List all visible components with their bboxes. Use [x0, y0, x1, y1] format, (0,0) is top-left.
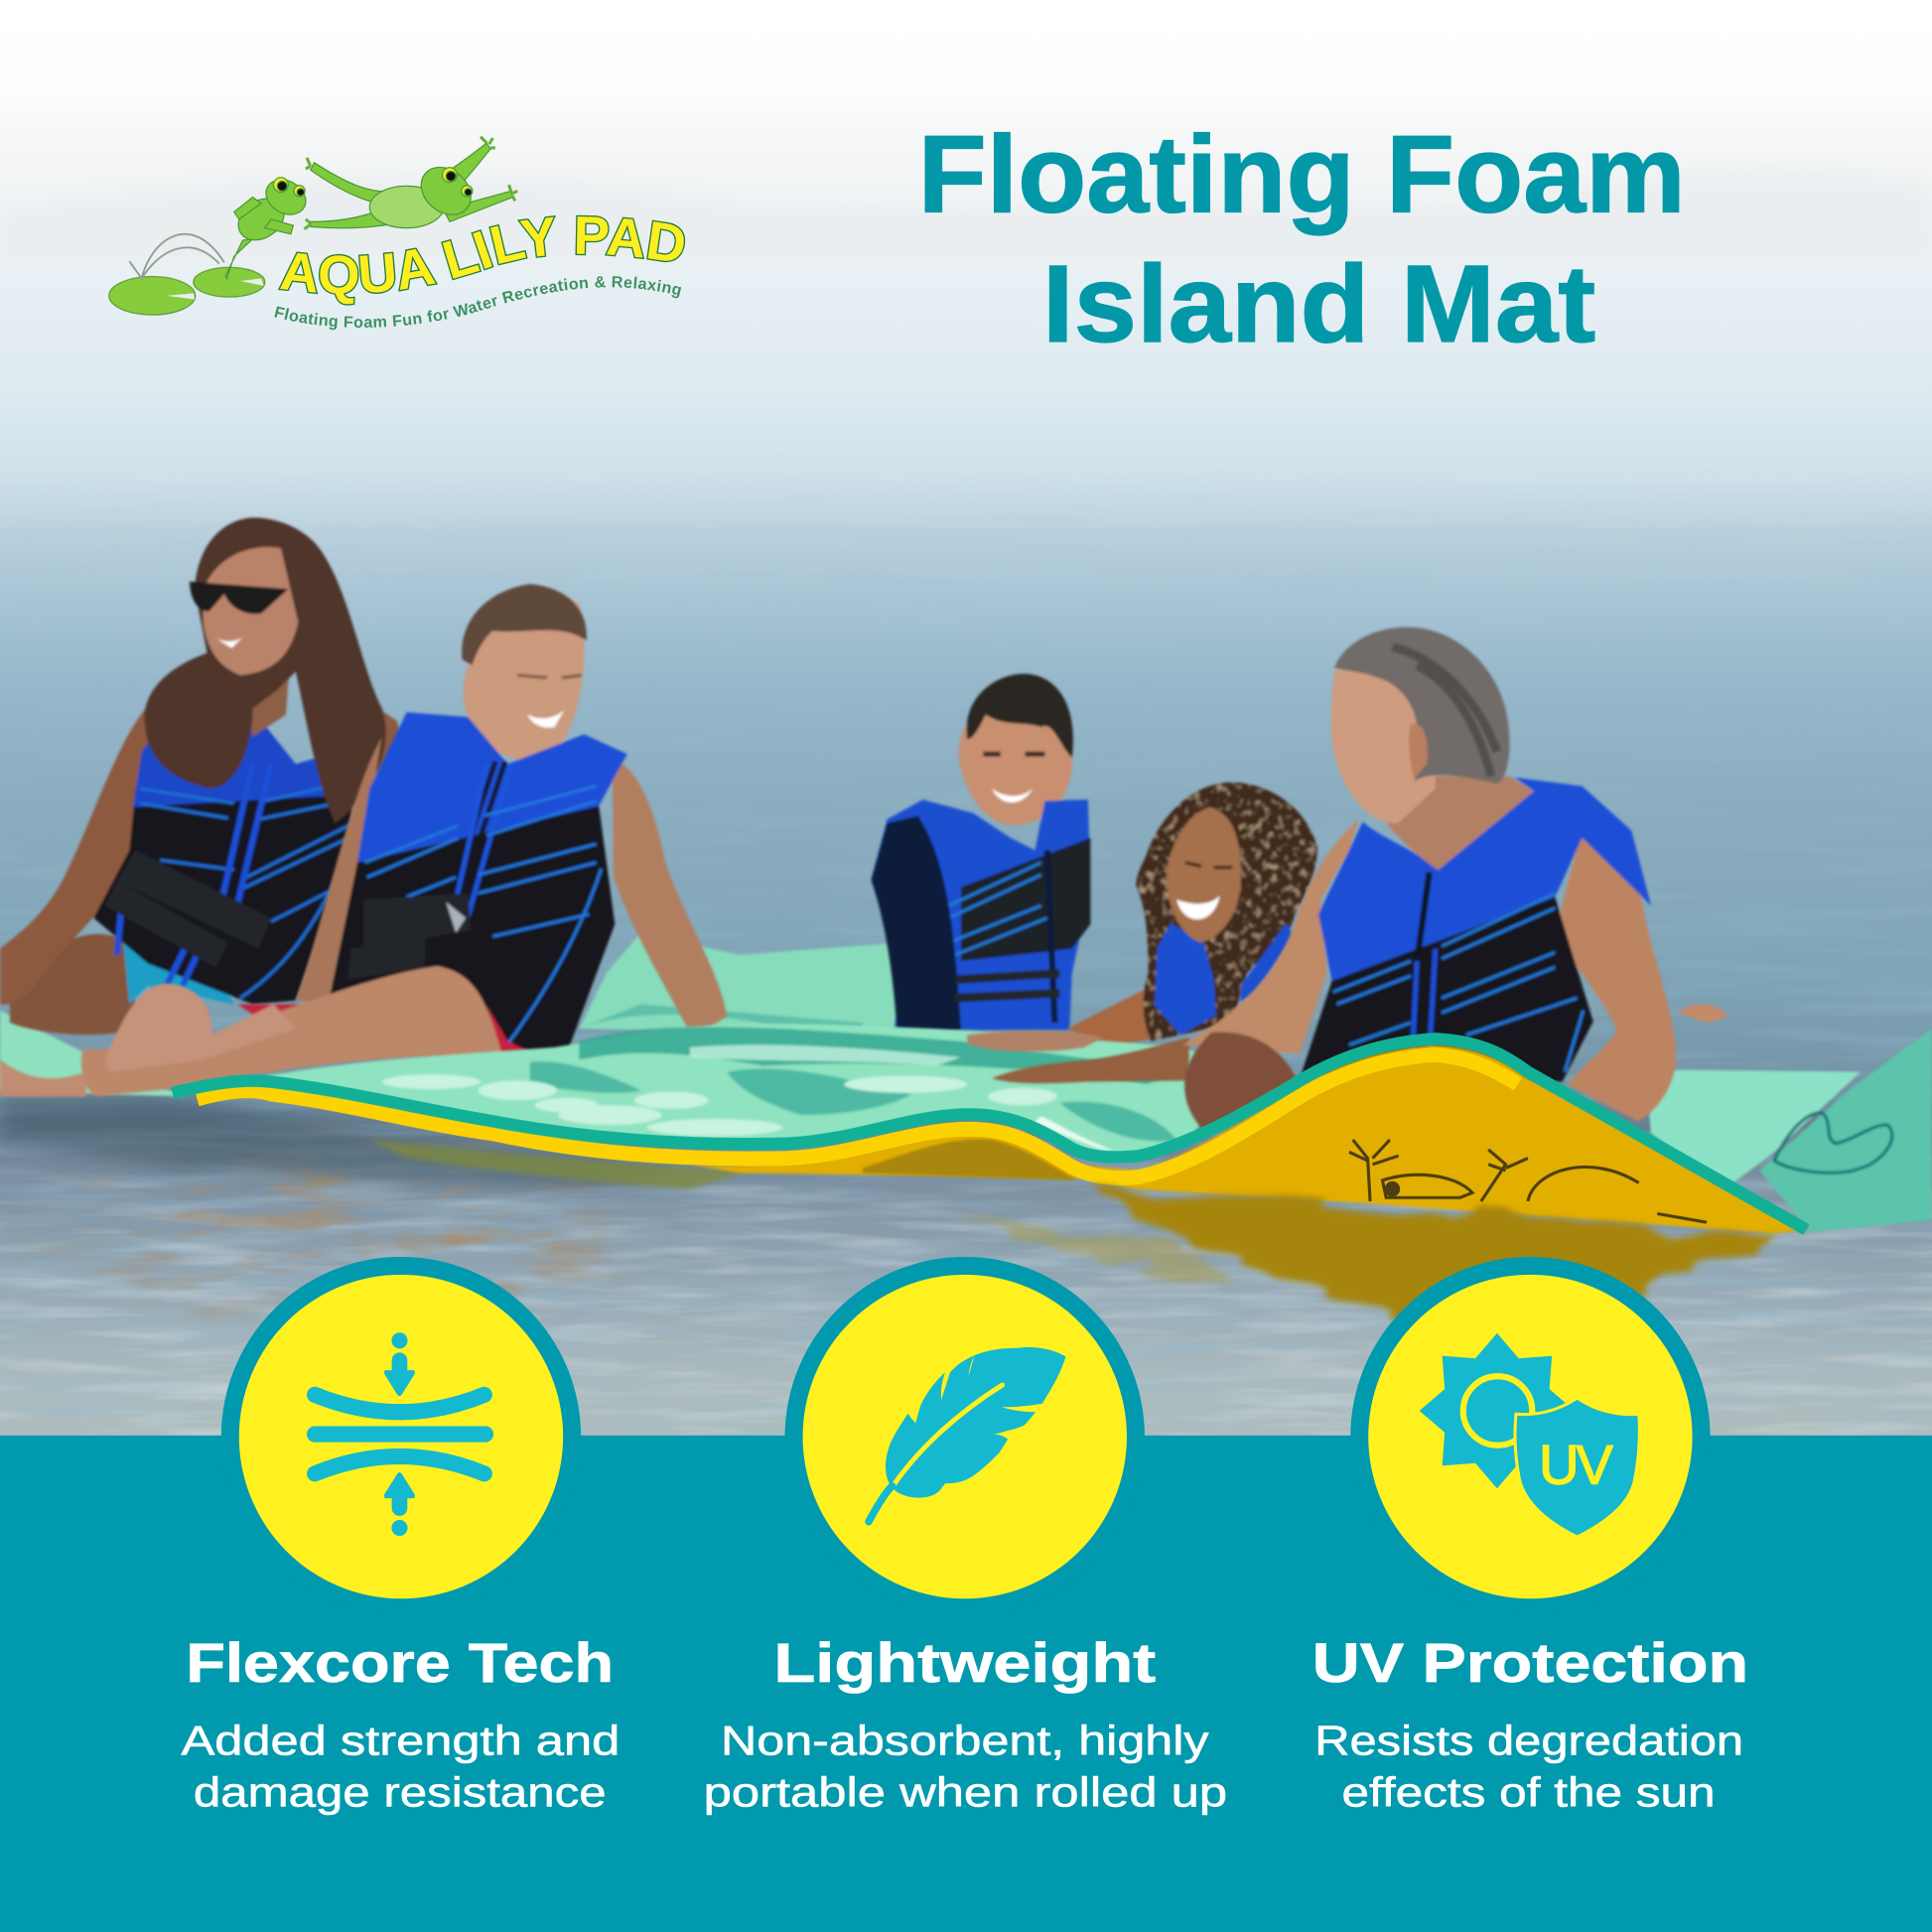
logo: wordmark: AQUA LILY PAD [278, 214, 685, 306]
heading: Lightweight [773, 1631, 1156, 1694]
icon: sun with UV shield: UV [1539, 1433, 1613, 1495]
badge circle [221, 1257, 581, 1616]
description: Non-absorbent, highly [721, 1717, 1209, 1763]
boy: dark sleeve [871, 816, 961, 1031]
description: effects of the sun [1342, 1768, 1716, 1815]
background photo: lake water and hazy sky [0, 0, 1932, 1442]
icon: compression arrows [307, 1332, 493, 1536]
mat: shadowed underside [863, 1139, 1078, 1180]
hands on the mat [967, 1031, 1189, 1083]
young man: red shorts [238, 1004, 538, 1057]
boy: vest [871, 799, 1090, 1031]
description: damage resistance [194, 1768, 607, 1815]
woman: arms [0, 690, 404, 1005]
young man: buckle and straps [347, 894, 471, 980]
description [181, 1717, 620, 1815]
boy: head [959, 696, 1072, 826]
description [1314, 1717, 1743, 1815]
badge circle [785, 1257, 1145, 1616]
older man: vest [1302, 897, 1593, 1082]
logo: Aqua Lily Pad [108, 135, 685, 330]
logo: tagline: Floating Foam Fun for Water Recreation & Relaxing [274, 276, 681, 330]
woman: legs [10, 934, 138, 1035]
young man in blue life vest [0, 584, 727, 1097]
feature: UV Protection [1312, 1257, 1748, 1815]
icon: feather [869, 1347, 1066, 1522]
logo: big leaping frog [305, 137, 517, 229]
title: Island Mat [1042, 243, 1595, 365]
young man: legs [81, 966, 502, 1097]
older man in blue life vest [1182, 627, 1728, 1133]
girl in blue life vest [1067, 782, 1317, 1047]
title: Floating Foam [918, 113, 1686, 235]
girl: face [1167, 807, 1241, 942]
girl: far foot in water [1678, 1004, 1728, 1023]
older man: right arm [1555, 828, 1676, 1121]
feature: Flexcore Tech [181, 1257, 620, 1815]
mat: yellow stripe [198, 1054, 1518, 1178]
woman in blue life vest [0, 517, 404, 1035]
description: Resists degredation [1314, 1717, 1743, 1763]
bottom teal band [0, 1436, 1932, 1932]
girl: vest [1155, 923, 1294, 1035]
woman: belt [104, 850, 271, 967]
title [918, 113, 1686, 365]
young man: arms [613, 760, 727, 1037]
older man: left arm [1182, 818, 1359, 1053]
young man: head [464, 594, 584, 761]
description: portable when rolled up [704, 1768, 1227, 1815]
logo: small frog [225, 173, 312, 278]
boy in blue life vest [871, 674, 1090, 1031]
badge circle [1350, 1257, 1711, 1616]
woman: face and sunglasses [204, 547, 298, 675]
feature: Lightweight [704, 1257, 1227, 1815]
heading: Flexcore Tech [186, 1631, 614, 1694]
heading: UV Protection [1312, 1631, 1748, 1694]
frog print on foam [1349, 1140, 1707, 1222]
mat: raised yellow foam edge with frog print [173, 1038, 1806, 1233]
girl: curly hair [1136, 782, 1317, 1041]
girl: arm behind mat [1067, 986, 1171, 1047]
mat: top surface with wet patches [173, 1024, 1244, 1158]
description: Added strength and [181, 1717, 620, 1763]
description [704, 1717, 1227, 1815]
lily-pad mat: back surface [0, 932, 1932, 1232]
older man: neck and head [1386, 776, 1534, 870]
young man: vest [329, 806, 615, 1057]
mat: teal stripe [173, 1038, 1806, 1230]
mat: folded end at far right [1759, 1029, 1932, 1232]
older man: knee [1184, 1033, 1297, 1133]
icon: sun with UV shield [1420, 1333, 1638, 1535]
yellow reflection on the water [961, 1189, 1774, 1337]
logo: lily pads and jump arcs [109, 234, 265, 315]
woman: vest [93, 788, 354, 1004]
woman: hair [144, 517, 386, 823]
